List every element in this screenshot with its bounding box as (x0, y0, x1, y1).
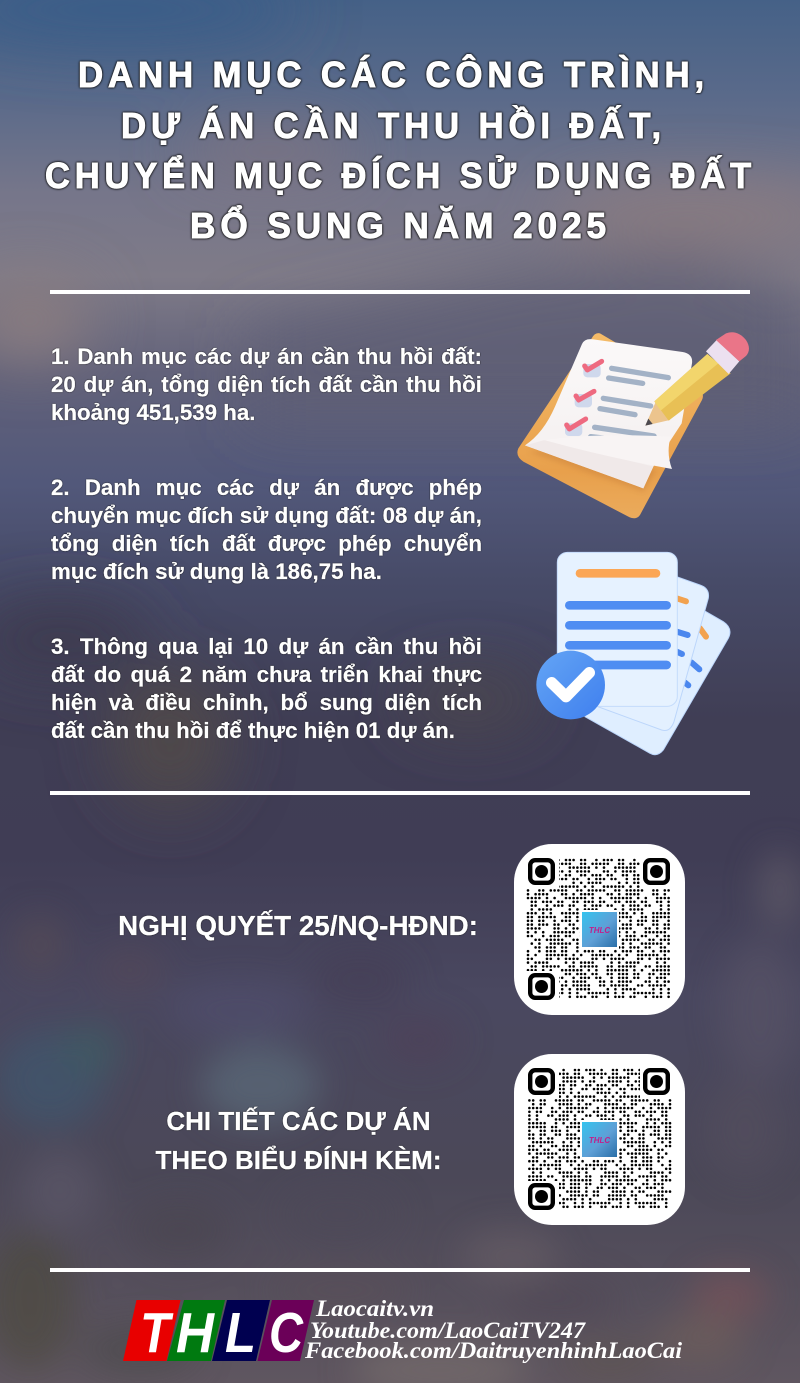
item 2 (50, 475, 482, 584)
item 1: khoảng 451,539 ha. (51, 400, 255, 425)
item 3: 3. Thông qua lại 10 dự án cần thu hồi (51, 634, 482, 659)
item 3: đất do quá 2 năm chưa triển khai thực (51, 662, 482, 687)
title: BỔ SUNG NĂM 2025 (190, 203, 611, 246)
icon: stacked documents with check badge (536, 552, 730, 756)
item 3 (51, 634, 482, 743)
footer: channel links: Youtube.com/LaoCaiTV247 (310, 1318, 587, 1343)
title: DANH MỤC CÁC CÔNG TRÌNH, (78, 53, 709, 95)
icon: checklist with pencil (517, 332, 749, 518)
QR code 2: THLC (589, 1136, 610, 1145)
title: CHUYỂN MỤC ĐÍCH SỬ DỤNG ĐẤT (45, 154, 756, 196)
item 1: 1. Danh mục các dự án cần thu hồi đất: (51, 344, 482, 369)
QR code 1: THLC (589, 926, 610, 935)
item 2: mục đích sử dụng là 186,75 ha. (51, 559, 382, 584)
footer: THLC logo: T (140, 1301, 174, 1365)
divider middle (50, 791, 750, 795)
footer: THLC logo: C (269, 1301, 304, 1365)
footer: THLC logo: H (176, 1301, 216, 1365)
item 1 (50, 344, 482, 426)
item 3: đất cần thu hồi để thực hiện 01 dự án. (51, 718, 455, 743)
item 2: chuyển mục đích sử dụng đất: 08 dự án, (51, 503, 482, 528)
body text (50, 344, 482, 743)
label: attached details (155, 1106, 442, 1175)
divider top (50, 290, 750, 294)
item 1: 20 dự án, tổng diện tích đất cần thu hồi (51, 372, 482, 397)
footer: THLC logo: L (225, 1301, 256, 1365)
divider bottom (50, 1268, 750, 1272)
item 3: hiện và điều chỉnh, bổ sung diện tích (51, 690, 482, 715)
label: attached details: THEO BIỂU ĐÍNH KÈM: (156, 1145, 442, 1175)
footer: channel links: Facebook.com/DaitruyenhinhLaoCai (304, 1338, 683, 1363)
item 2: 2. Danh mục các dự án được phép (51, 475, 482, 500)
label: attached details: CHI TIẾT CÁC DỰ ÁN (166, 1106, 431, 1136)
title: DỰ ÁN CẦN THU HỒI ĐẤT, (121, 104, 666, 146)
label: resolution: NGHỊ QUYẾT 25/NQ-HĐND: (118, 910, 478, 941)
title (44, 52, 756, 246)
footer: channel links: Laocaitv.vn (315, 1296, 434, 1321)
item 2: tổng diện tích đất được phép chuyển (51, 531, 482, 556)
